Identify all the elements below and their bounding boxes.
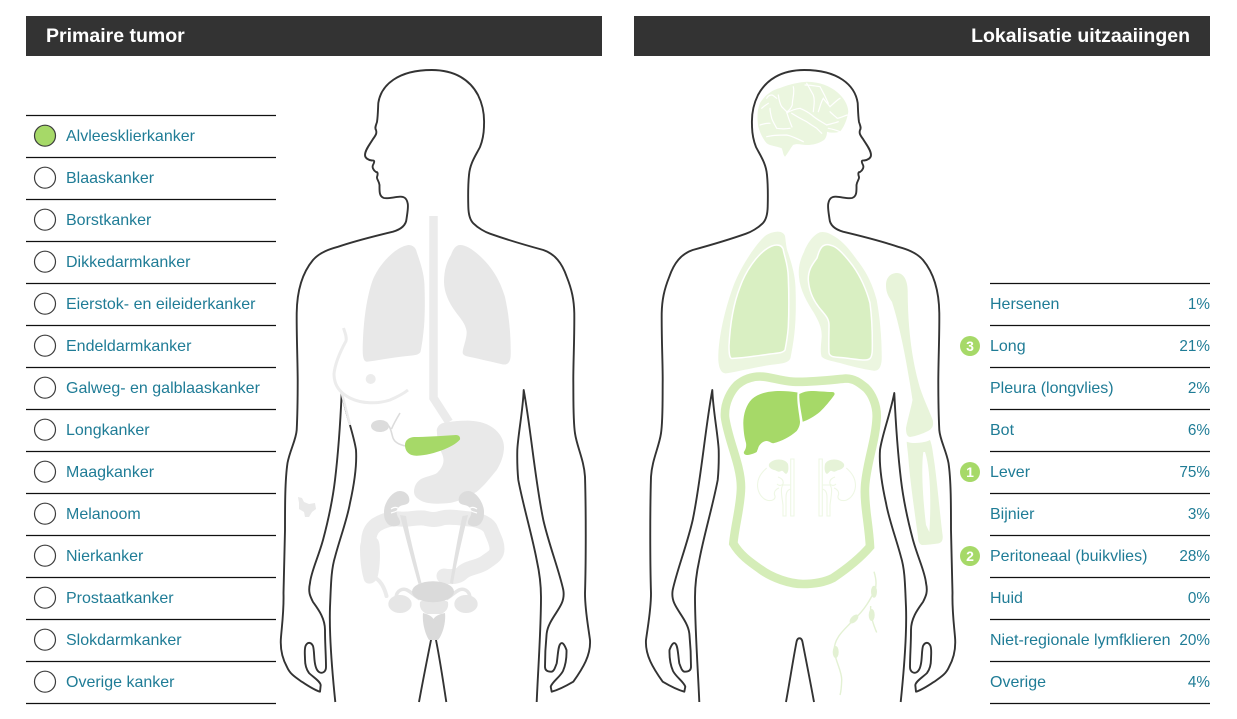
organ: liver (highlighted) xyxy=(743,391,835,455)
radio: Blaaskanker xyxy=(34,167,155,188)
row: Niet-regionale lymfklieren: 20% xyxy=(1179,632,1210,649)
row: Peritoneaal: Peritoneaal (buikvlies) xyxy=(990,548,1147,565)
radio: Galweg- en galblaaskanker: Galweg- en galblaaskanker xyxy=(66,380,261,397)
row: Hersenen: 1% xyxy=(1188,296,1210,313)
organ: pancreas (highlighted) xyxy=(405,435,460,456)
figure: metastasis body xyxy=(646,70,955,702)
row: Niet-regionale lymfklieren: Niet-regionale lymfklieren xyxy=(990,632,1171,649)
organ: ascending colon xyxy=(360,536,380,584)
radio: Longkanker xyxy=(34,419,150,440)
radio: Slokdarmkanker: Slokdarmkanker xyxy=(66,632,182,649)
selected radio: Alvleesklierkanker: Alvleesklierkanker xyxy=(66,128,196,145)
row: Bot: Bot xyxy=(990,422,1015,439)
row: Pleura: 2% xyxy=(1188,380,1210,397)
header: Primaire tumor xyxy=(26,16,602,56)
row: Pleura: Pleura (longvlies) xyxy=(990,380,1114,397)
header: Primaire tumor: Primaire tumor xyxy=(46,25,185,47)
organ: brain xyxy=(757,82,848,157)
row: Long: 21% xyxy=(1179,338,1210,355)
radio: Nierkanker xyxy=(34,545,144,566)
organ: left kidney outline xyxy=(758,459,794,516)
figure: primary tumor body xyxy=(281,70,590,702)
row: Bot xyxy=(990,422,1210,439)
radio: Maagkanker: Maagkanker xyxy=(66,464,155,481)
row: Hersenen: Hersenen xyxy=(990,296,1059,313)
radio: Dikkedarmkanker: Dikkedarmkanker xyxy=(66,254,191,271)
row: Huid: Huid xyxy=(990,590,1023,607)
badge 3 xyxy=(960,336,980,356)
forearm bone gap xyxy=(922,452,930,532)
organ: gallbladder and ducts xyxy=(371,413,406,446)
row: Long: Long xyxy=(990,338,1026,355)
organ: peritoneum xyxy=(725,376,877,584)
list: primary tumor types xyxy=(26,116,276,704)
radio: Galweg- en galblaaskanker xyxy=(34,377,261,398)
badge 2: 2 xyxy=(966,548,974,564)
legs inner outline xyxy=(419,637,446,702)
organ: left kidney and ureter xyxy=(384,491,422,584)
row: Overige xyxy=(990,674,1210,691)
radio: Prostaatkanker xyxy=(34,587,174,608)
organ: lymph nodes xyxy=(833,572,877,695)
organ: forearm bones xyxy=(907,440,943,545)
radio: Maagkanker xyxy=(34,461,155,482)
organ: uterus xyxy=(420,599,448,614)
organ: right kidney outline xyxy=(819,459,856,516)
organ: right lung xyxy=(444,245,511,365)
radio: Endeldarmkanker xyxy=(34,335,192,356)
legs inner outline xyxy=(786,638,814,702)
radio: Overige kanker xyxy=(34,671,175,692)
radio: Borstkanker xyxy=(34,209,152,230)
row: Overige: 4% xyxy=(1188,674,1210,691)
radio: Melanoom xyxy=(34,503,141,524)
organ: bladder xyxy=(412,581,454,602)
header: Lokalisatie uitzaaiingen xyxy=(634,16,1210,56)
organ: fallopian tubes and ovaries xyxy=(388,589,478,613)
body outline xyxy=(646,70,955,702)
organ: esophagus xyxy=(434,216,449,422)
row: Lever: 75% xyxy=(1179,464,1210,481)
row: Huid xyxy=(990,590,1210,607)
row: Bijnier xyxy=(990,506,1210,523)
badge 3: 3 xyxy=(966,338,974,354)
radio: Longkanker: Longkanker xyxy=(66,422,150,439)
organ: vagina xyxy=(423,613,445,640)
row: Long xyxy=(990,338,1210,355)
row: Huid: 0% xyxy=(1188,590,1210,607)
row: Lever xyxy=(990,464,1210,481)
row: Overige: Overige xyxy=(990,674,1046,691)
row: Bijnier: 3% xyxy=(1188,506,1210,523)
radio: Blaaskanker: Blaaskanker xyxy=(66,170,155,187)
organ: left lung xyxy=(729,245,789,358)
organ: right lung xyxy=(808,245,872,360)
radio: Eierstok- en eileiderkanker xyxy=(34,293,256,314)
organ: humerus xyxy=(886,273,933,437)
organ: breast xyxy=(334,328,408,425)
row: Pleura xyxy=(990,380,1210,397)
melanoma skin patch xyxy=(298,497,316,517)
organ: stomach xyxy=(414,421,504,504)
radio: Nierkanker: Nierkanker xyxy=(66,548,144,565)
badge 1 xyxy=(960,462,980,482)
organ: left pleura xyxy=(718,232,796,373)
body outline xyxy=(281,70,590,702)
row: Bot: 6% xyxy=(1188,422,1210,439)
table: metastasis locations xyxy=(960,284,1210,704)
row: Peritoneaal: 28% xyxy=(1179,548,1210,565)
radio: Melanoom: Melanoom xyxy=(66,506,141,523)
radio: Endeldarmkanker: Endeldarmkanker xyxy=(66,338,192,355)
selected radio: Alvleesklierkanker xyxy=(34,125,196,146)
organ: left lung xyxy=(363,245,425,362)
radio: Eierstok- en eileiderkanker: Eierstok- en eileiderkanker xyxy=(66,296,256,313)
organ: right kidney and ureter xyxy=(450,491,484,584)
radio: Dikkedarmkanker xyxy=(34,251,191,272)
row: Lever: Lever xyxy=(990,464,1031,481)
organ: tail of colon xyxy=(377,579,386,596)
radio: Slokdarmkanker xyxy=(34,629,182,650)
header: Lokalisatie uitzaaiingen: Lokalisatie uitzaaiingen xyxy=(971,25,1190,47)
row: Hersenen xyxy=(990,296,1210,313)
badge 2 xyxy=(960,546,980,566)
radio: Overige kanker: Overige kanker xyxy=(66,674,175,691)
radio: Borstkanker: Borstkanker xyxy=(66,212,152,229)
organ: colon xyxy=(368,517,497,577)
badge 1: 1 xyxy=(966,464,974,480)
row: Bijnier: Bijnier xyxy=(990,506,1035,523)
radio: Prostaatkanker: Prostaatkanker xyxy=(66,590,174,607)
organ: right pleura xyxy=(799,232,882,371)
